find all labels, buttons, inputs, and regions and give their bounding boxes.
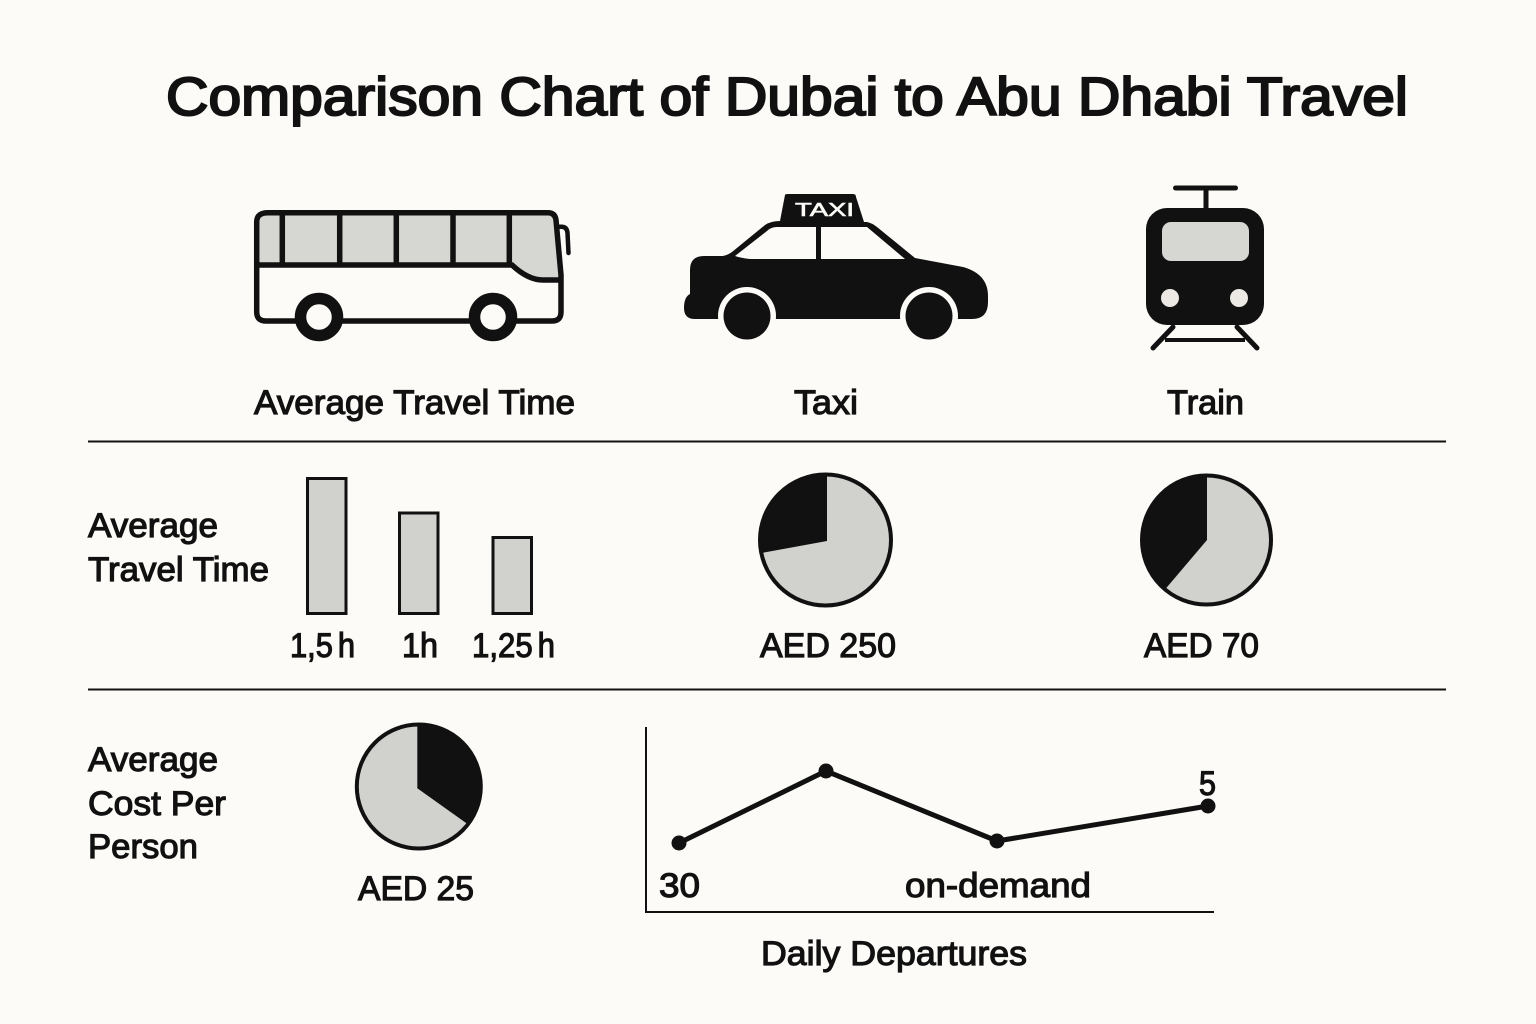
title: Comparison Chart of Dubai to Abu Dhabi Travel	[166, 67, 1408, 127]
bar chart: travel time: 1,25 h	[472, 627, 555, 665]
pie chart: taxi cost	[760, 474, 896, 665]
row heading: average travel time	[88, 507, 269, 589]
line chart: daily departures: on-demand	[905, 867, 1091, 905]
pie chart: bus cost	[357, 724, 481, 908]
line chart: daily departures: 30	[659, 867, 700, 905]
row heading: average travel time: Average	[88, 507, 218, 545]
pie chart: train cost: AED 70	[1144, 627, 1259, 665]
label: taxi column: Taxi	[794, 384, 858, 422]
line chart: daily departures: Daily Departures	[761, 935, 1027, 973]
divider top	[88, 440, 1446, 442]
row heading: average cost per person	[88, 741, 226, 866]
bar chart: travel time: 1,5 h	[290, 627, 355, 665]
divider bottom	[88, 688, 1446, 690]
pie chart: train cost	[1142, 475, 1271, 665]
line chart: daily departures: 5	[1199, 765, 1216, 803]
pie chart: taxi cost: AED 250	[760, 627, 896, 665]
icon: train	[1146, 188, 1264, 348]
taxi sign text: TAXI	[795, 200, 854, 220]
pie chart: bus cost: AED 25	[358, 870, 474, 908]
row heading: average cost per person: Person	[88, 828, 198, 866]
label: train column: Train	[1167, 384, 1244, 422]
icon: taxi	[684, 194, 988, 350]
bar chart: travel time: 1h	[402, 627, 438, 665]
icon: bus	[257, 213, 568, 336]
bar chart: travel time	[290, 478, 555, 665]
row heading: average cost per person: Average	[88, 741, 218, 779]
row heading: average cost per person: Cost Per	[88, 785, 226, 823]
label: average travel time column: Average Travel Time	[254, 384, 575, 422]
line chart: daily departures	[646, 727, 1216, 973]
row heading: average travel time: Travel Time	[88, 551, 269, 589]
